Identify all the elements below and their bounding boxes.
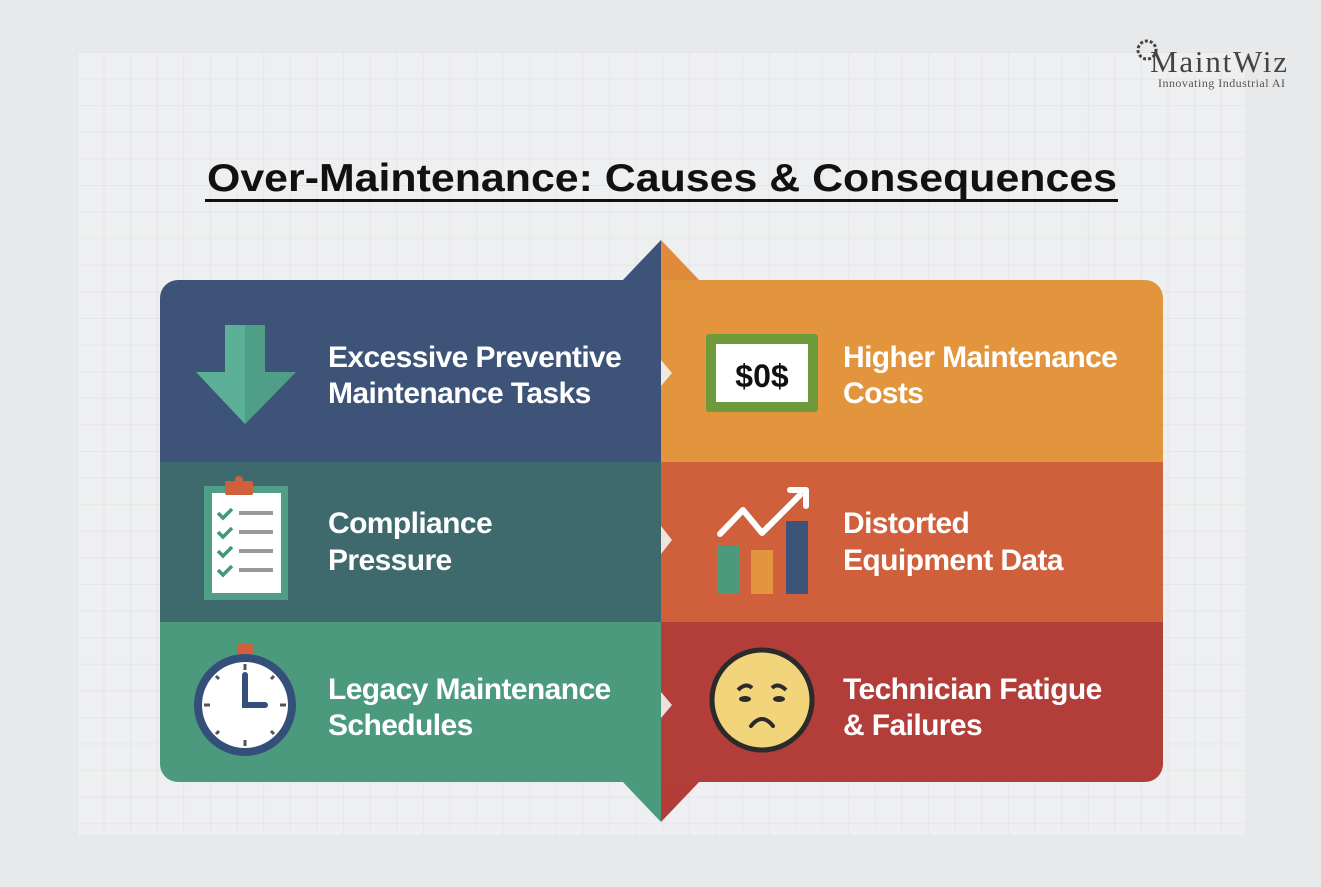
icon: chart	[717, 490, 808, 594]
text: consequence 1: Higher Maintenance	[843, 341, 1117, 374]
chevrons	[661, 360, 672, 718]
text: consequence 3: Technician Fatigue	[843, 673, 1102, 706]
logo: Innovating Industrial AI	[1158, 76, 1285, 90]
logo	[1138, 41, 1287, 90]
text: cause 3: Schedules	[328, 709, 473, 742]
text: consequence 2: Distorted	[843, 507, 969, 540]
text: cause 1: Maintenance Tasks	[328, 377, 591, 410]
icon: money	[706, 334, 818, 412]
panel: causes and consequences	[160, 280, 1163, 782]
icon: money: $0$	[735, 358, 789, 394]
text: cause 1: Excessive Preventive	[328, 341, 621, 374]
diamond arrow tips	[621, 240, 701, 822]
icon: sad face	[712, 650, 812, 750]
text: cause 2: Pressure	[328, 544, 452, 577]
icon: clock	[198, 644, 292, 752]
icon: clipboard	[204, 476, 288, 600]
logo: MaintWiz	[1150, 44, 1287, 79]
text: consequence 2: Equipment Data	[843, 544, 1064, 577]
text: consequence 1: Costs	[843, 377, 923, 410]
text: cause 3: Legacy Maintenance	[328, 673, 611, 706]
text: consequence 3: & Failures	[843, 709, 982, 742]
title: Over-Maintenance: Causes & Consequences	[207, 157, 1117, 200]
icon: down arrow	[196, 325, 296, 424]
text: cause 2: Compliance	[328, 507, 492, 540]
